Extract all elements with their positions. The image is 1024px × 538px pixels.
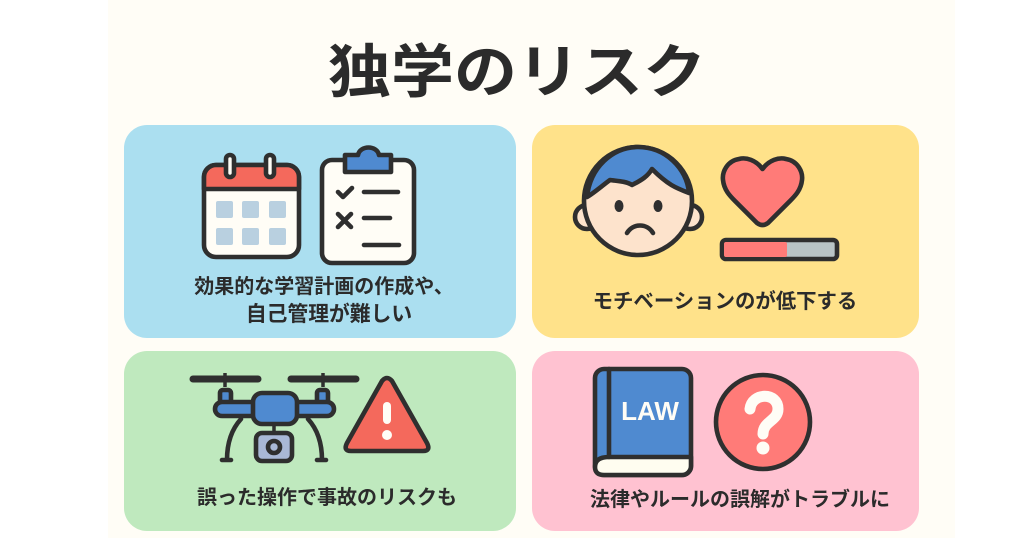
icon: warning triangle [346, 378, 428, 451]
panel background: blue [124, 125, 516, 338]
icon: sad face [575, 147, 702, 255]
panel background: yellow [532, 125, 919, 338]
panel: law misunderstanding [532, 351, 919, 531]
progress bar [722, 240, 837, 259]
icon: heart [723, 158, 802, 225]
book label: LAW [621, 396, 679, 426]
panel: study planning [124, 125, 516, 338]
title: 独学のリスク [328, 39, 706, 104]
caption: law misunderstanding: 法律やルールの誤解がトラブルに [590, 487, 890, 511]
caption line 2: 自己管理が難しい [246, 302, 412, 326]
icon: calendar [204, 155, 299, 257]
caption: study planning: 効果的な学習計画の作成や、 [194, 274, 454, 298]
icon: drone [193, 373, 356, 461]
icon: law book [595, 369, 691, 475]
panel: drone accident [124, 351, 516, 531]
panel background: green [124, 351, 516, 531]
caption: drone accident: 誤った操作で事故のリスクも [197, 486, 457, 509]
panel background: pink [532, 351, 919, 531]
icon: clipboard checklist [322, 148, 414, 263]
caption: motivation: モチベーションのが低下する [593, 289, 857, 313]
icon: question mark circle [716, 375, 810, 469]
panel: motivation [532, 125, 919, 338]
